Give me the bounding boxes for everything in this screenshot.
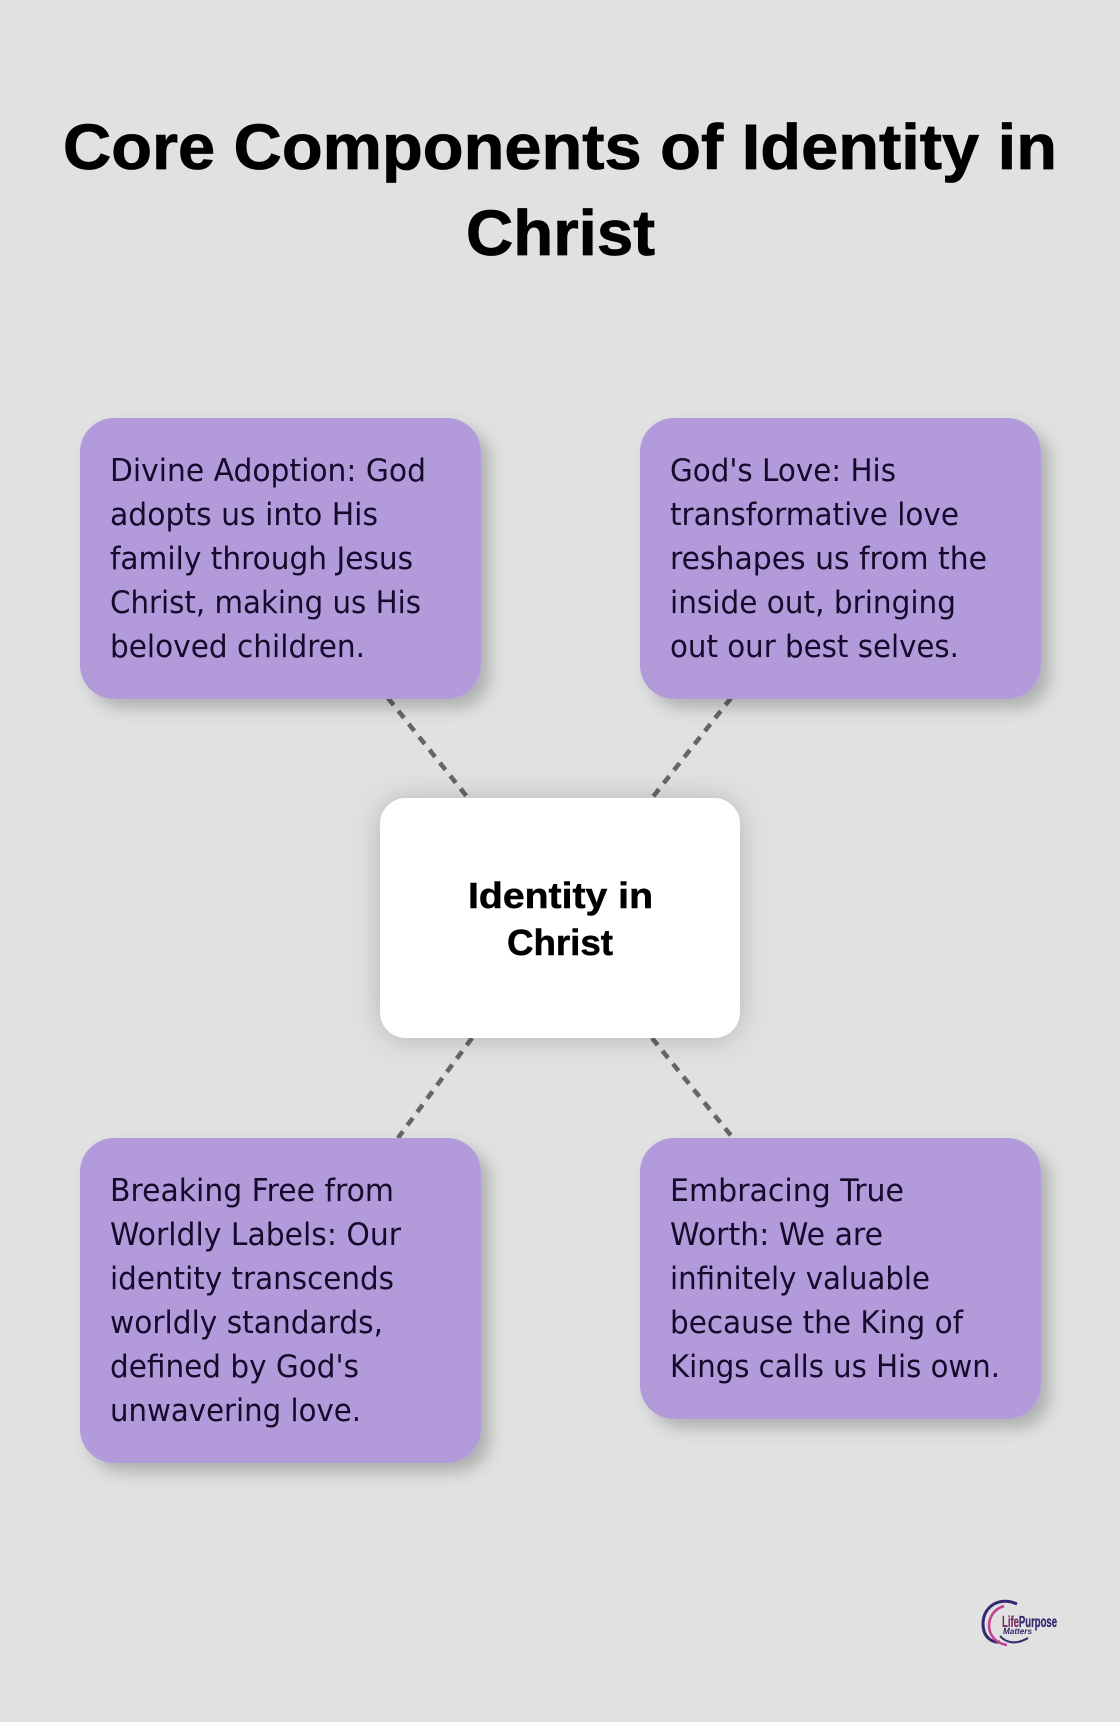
center label [468,875,653,963]
text: breaking free: worldly standards, [110,1305,383,1341]
text: god's love: out our best selves. [670,629,959,665]
panel: breaking free from worldly labels [80,1138,481,1463]
panel: center identity in christ [380,798,740,1038]
connector: god's love to center [652,698,731,798]
connector: center to embracing true worth [652,1038,733,1138]
connector: divine adoption to center [388,698,468,798]
text: divine adoption: Divine Adoption: God [110,453,426,489]
connector: center to breaking free [398,1038,472,1138]
text: embracing true worth: because the King of [670,1305,964,1341]
panel: god's love [640,418,1041,699]
text: divine adoption: family through Jesus [110,541,413,577]
text: god's love: transformative love [670,497,959,533]
text: divine adoption [110,453,426,665]
logo: life purpose matters: Matters [1003,1627,1033,1636]
title [63,111,1057,269]
panel: divine adoption [80,418,481,699]
logo: life purpose matters [983,1601,1057,1645]
text: embracing true worth [670,1173,1000,1385]
text: embracing true worth: Embracing True [670,1173,904,1209]
text: breaking free: defined by God's [110,1349,359,1385]
text: divine adoption: adopts us into His [110,497,378,533]
center label: Identity in [468,875,653,916]
panel: embracing true worth [640,1138,1041,1419]
text: breaking free: Breaking Free from [110,1173,394,1209]
text: embracing true worth: Worth: We are [670,1217,883,1253]
text: embracing true worth: infinitely valuable [670,1261,930,1297]
title: Core Components of Identity in [63,111,1057,183]
title: Christ [466,197,655,269]
text: god's love: inside out, bringing [670,585,956,621]
text: god's love: reshapes us from the [670,541,987,577]
text: breaking free: unwavering love. [110,1393,361,1429]
text: god's love [670,453,987,665]
text: breaking free [110,1173,401,1429]
text: breaking free: identity transcends [110,1261,394,1297]
text: divine adoption: Christ, making us His [110,585,421,621]
text: breaking free: Worldly Labels: Our [110,1217,401,1253]
logo: life purpose matters: LifePurpose [1002,1614,1057,1631]
text: god's love: God's Love: His [670,453,896,489]
center label: Christ [507,922,613,963]
text: embracing true worth: Kings calls us His own. [670,1349,1000,1385]
text: divine adoption: beloved children. [110,629,365,665]
